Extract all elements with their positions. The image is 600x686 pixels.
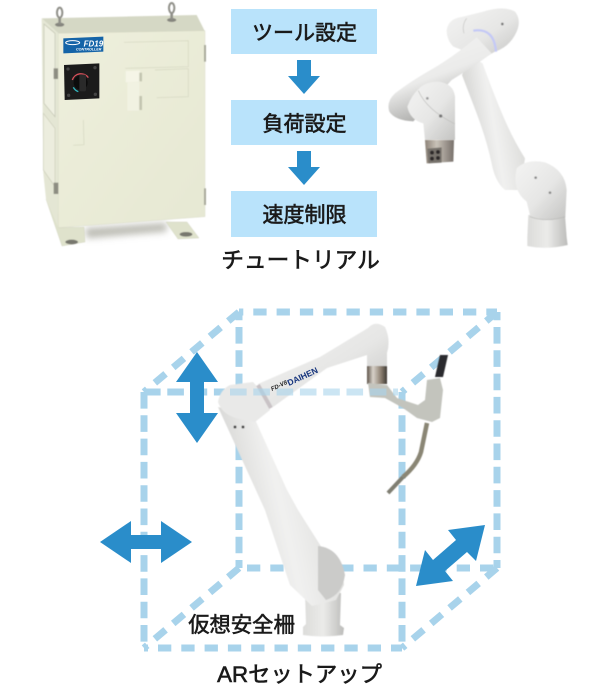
- base: [303, 593, 344, 636]
- label: virtual safety fence: 仮想安全柵: [188, 613, 295, 637]
- step: speed limit: 速度制限: [262, 204, 346, 227]
- virtual safety fence cube: [144, 312, 497, 648]
- welding robot: [218, 324, 448, 636]
- controller cabinet: [42, 3, 206, 246]
- rotary switch: [64, 63, 99, 100]
- label plate: FD19: [84, 39, 104, 48]
- step: load settings: [231, 100, 377, 145]
- chrome flange: [367, 366, 387, 384]
- logo text: DAIHEN: [286, 365, 319, 388]
- step: tool settings: ツール設定: [252, 22, 357, 45]
- torch neck: [403, 423, 427, 477]
- robot arm with gripper: [388, 8, 568, 248]
- torch bracket: [368, 378, 443, 422]
- step: speed limit: [231, 191, 377, 237]
- fence overlay line: [230, 388, 398, 396]
- logo mark: FD-V8: [270, 380, 289, 393]
- label plate: CONTROLLER: [76, 48, 102, 52]
- arrow: horizontal: [100, 521, 192, 563]
- gripper flange: [425, 140, 454, 163]
- upper arm and elbow: [258, 324, 389, 407]
- flow steps: [231, 9, 377, 237]
- cover plates and handle: [73, 41, 188, 145]
- arrow: down 2: [288, 151, 320, 185]
- arrow: diagonal: [416, 525, 485, 586]
- arrow: vertical: [176, 352, 218, 443]
- lower arm: [218, 407, 344, 606]
- step: load settings: 負荷設定: [262, 113, 346, 136]
- caption: tutorial: チュートリアル: [221, 247, 380, 273]
- label plate: [63, 37, 104, 53]
- arrow: down 1: [288, 60, 320, 94]
- step: tool settings: [231, 9, 377, 54]
- torch cable: [435, 355, 448, 377]
